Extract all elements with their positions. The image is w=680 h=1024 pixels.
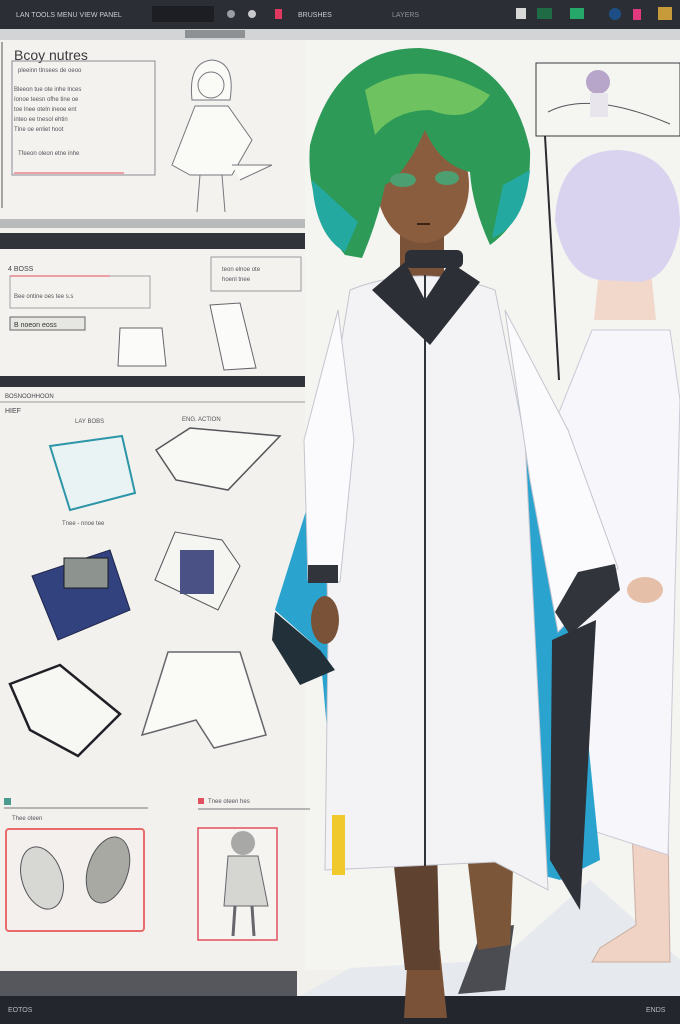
panel: accessories sketches: Tnee - nnoe tee — [62, 521, 105, 527]
label: lower right — [198, 798, 310, 809]
sketch: striped panel — [155, 532, 240, 610]
sketch: teal garment — [50, 436, 135, 510]
bottom status bar left — [0, 971, 297, 996]
neck — [400, 225, 444, 285]
text block: notes box: Bleeon tue ote inhe lnces — [14, 87, 81, 93]
text block: notes box: Tfeeon oleon etne inhe — [18, 151, 80, 157]
sub toolbar strip — [0, 29, 680, 40]
sleeve right — [505, 310, 618, 632]
closed coat — [325, 276, 548, 890]
top toolbar: LAN TOOLS MENU VIEW PANEL — [16, 12, 122, 19]
panel: accessories sketches: HIEF — [5, 408, 21, 415]
back view hair — [555, 150, 680, 282]
panel: reference thumbnail — [536, 63, 680, 136]
head — [377, 127, 469, 243]
heading: notes title: Bcoy nutres — [14, 47, 88, 63]
top toolbar — [0, 0, 680, 29]
sketch: outline cloth — [142, 652, 266, 748]
label: lower left — [4, 798, 148, 822]
text block: side note — [211, 257, 301, 291]
sketch: fabric fold two — [210, 303, 256, 370]
sketch: fabric fold one — [118, 328, 166, 366]
panel: character notes — [0, 40, 305, 228]
label: section tag: B noeon eoss — [14, 322, 57, 329]
text block: measurements — [10, 276, 150, 308]
text block: notes box: pleeinn tlnsees de oeoo — [18, 68, 82, 74]
text block: notes box — [12, 61, 155, 175]
label: lower right: Tnee oteen hes — [208, 799, 250, 805]
back view legs — [592, 830, 670, 962]
panel: character thumbnail — [198, 828, 277, 940]
panel: accessories sketches: BOSNOOHHOON — [5, 394, 54, 400]
text block: notes box: Ionoe teesn ofhe tine oe — [14, 97, 79, 103]
panel: accessories sketches — [0, 387, 310, 968]
top toolbar: LAYERS — [392, 12, 419, 19]
eyes — [390, 173, 416, 187]
text block: side note: teon elnoe ote — [222, 267, 261, 273]
panel: shoe sketches — [6, 829, 144, 931]
panel: detail notes: 4 BOSS — [8, 266, 34, 273]
divider bar — [0, 233, 305, 249]
legs — [370, 640, 440, 970]
text block: measurements: Bee ontine oes tee s.s — [14, 294, 73, 300]
bottom status bar — [0, 996, 680, 1024]
bottom status bar: EOTOS — [8, 1007, 33, 1014]
label: lower left: Thee oteen — [12, 816, 42, 822]
hair — [309, 48, 530, 258]
feet — [404, 950, 447, 1018]
text block: side note: hoenl tnee — [222, 277, 251, 283]
sleeve left — [304, 310, 354, 582]
bottom status bar: ENDS — [646, 1007, 666, 1014]
choker — [405, 250, 463, 268]
figure: back view character — [540, 136, 680, 962]
back view robe — [540, 330, 680, 855]
coat lining — [275, 420, 600, 880]
text block: notes box: inteo ee tnesol ehtin — [14, 117, 68, 123]
text block: notes box: toe lnee oteln ineoe ent — [14, 107, 77, 113]
divider bar — [0, 376, 305, 387]
sketch: folded cloth — [10, 665, 120, 756]
floor shadow — [300, 880, 680, 996]
panel: accessories sketches: ENG. ACTION — [182, 417, 221, 423]
panel: accessories sketches: LAY BOBS — [75, 419, 104, 425]
top toolbar: BRUSHES — [298, 12, 332, 19]
mouth — [417, 223, 430, 225]
label: section tag — [10, 317, 85, 330]
sketch: cape — [156, 428, 280, 490]
text block: notes box: Tlne oe enliet hoot — [14, 127, 64, 133]
hands — [311, 596, 339, 644]
coat collar — [372, 262, 480, 345]
sketch: small character — [172, 60, 272, 212]
coat trim — [272, 612, 335, 685]
sketch: navy bag — [32, 550, 130, 640]
figure: main character — [272, 48, 663, 1018]
back view neck — [594, 262, 656, 320]
panel: detail notes — [0, 249, 305, 376]
